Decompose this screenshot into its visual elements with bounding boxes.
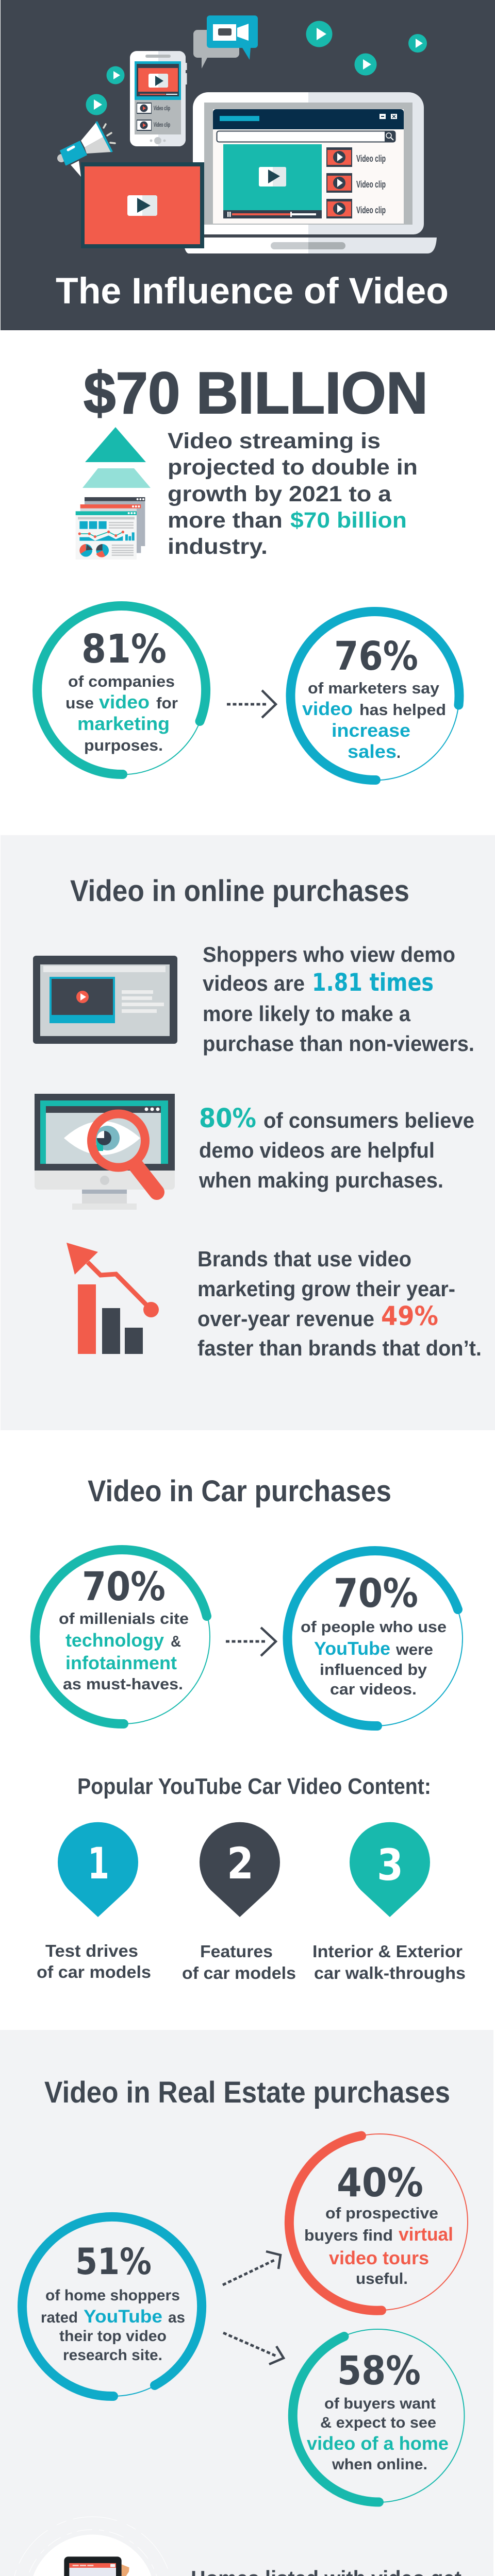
stat circle: 40%: video tours <box>329 2247 429 2268</box>
stat circle: 81% of companies: 81% <box>81 626 167 672</box>
stat circle: 58%: 58% <box>337 2348 421 2394</box>
panel: header <box>1 0 495 330</box>
text: 49%: faster than brands that don’t. <box>197 1336 482 1360</box>
pin 3: walk-throughs: Interior & Exterior <box>312 1942 463 1961</box>
text: streaming projection: projected to double in <box>168 455 418 480</box>
pin 3: walk-throughs: car walk-throughs <box>314 1963 466 1982</box>
stat circle: 70% of YouTube users <box>287 1551 463 1726</box>
text: 80%: when making purchases. <box>199 1168 443 1192</box>
stat circle: 70% of YouTube users: influenced by <box>320 1660 427 1679</box>
text: 49% <box>197 1247 482 1360</box>
icon: megaphone <box>57 122 115 177</box>
pin 3: walk-throughs <box>312 1822 466 1982</box>
stat circle: 76% of marketers: has helped <box>359 701 446 719</box>
stat circle: 51%: YouTube <box>84 2307 162 2327</box>
stat circle: 81% of companies: video <box>99 691 150 713</box>
stat circle: 70% of millenials: of millenials cite <box>59 1609 189 1628</box>
panel: streaming growth <box>37 361 459 780</box>
text: 80%: of consumers believe <box>263 1108 474 1132</box>
text: 1.81 times: more likely to make a <box>203 1002 411 1026</box>
arrow: 81 to 76 <box>227 690 276 718</box>
text: 80%: 80% <box>199 1104 256 1134</box>
stat circle: 81% of companies: purposes. <box>84 736 163 754</box>
stat circle: 76% of marketers: increase <box>332 720 410 741</box>
stat circle: 81% of companies: for <box>156 694 178 712</box>
stat circle: 70% of millenials: technology <box>65 1630 164 1651</box>
stat circle: 76% of marketers: . <box>397 743 401 761</box>
pin 1: test drives: Test drives <box>45 1941 138 1960</box>
stat circle: 51%: rated <box>41 2309 78 2326</box>
arrow: car stats <box>226 1628 276 1656</box>
panel: video in real estate purchases <box>0 2030 493 2576</box>
icon: smartphone <box>130 51 187 146</box>
stat circle: 58% <box>291 2329 464 2502</box>
stat circle: 70% of millenials: as must-haves. <box>63 1675 183 1693</box>
text: 80%: demo videos are helpful <box>199 1138 435 1162</box>
icon: laptop <box>183 92 437 253</box>
pin 2: features: 2 <box>227 1838 254 1889</box>
icon: monitor with magnifier and eye <box>35 1094 175 1210</box>
stat circle: 81% of companies <box>37 606 206 775</box>
heading: $70 billion: $70 BILLION <box>84 361 428 426</box>
heading: Video in online purchases <box>70 874 409 908</box>
text: 49%: 49% <box>381 1301 438 1332</box>
text: 49%: Brands that use video <box>197 1247 411 1271</box>
stat circle: 70% of millenials: infotainment <box>65 1652 177 1673</box>
pin 1: test drives <box>37 1822 151 1981</box>
stat circle: 76% of marketers <box>290 612 459 780</box>
browser window: Video clip <box>356 205 386 215</box>
icon: bar chart with arrow <box>67 1243 159 1354</box>
stat circle: 70% of millenials: 70% <box>82 1564 166 1610</box>
stat circle: 70% of YouTube users: 70% <box>334 1571 418 1617</box>
stat circle: 40%: buyers find <box>304 2226 393 2244</box>
text: streaming projection: $70 billion <box>290 508 407 533</box>
pin 2: features: Features <box>200 1942 273 1961</box>
stat circle: 70% of millenials: & <box>171 1632 181 1650</box>
text: 1.81 times <box>203 942 474 1056</box>
browser window <box>213 109 404 224</box>
icon: smartphone: Video clip <box>154 106 170 112</box>
stat circle: 70% of YouTube users: were <box>395 1640 433 1658</box>
stat circle: 76% of marketers: 76% <box>334 634 418 680</box>
stat circle: 81% of companies: marketing <box>77 713 170 734</box>
stat circle: 76% of marketers: of marketers say <box>308 679 440 697</box>
stat circle: 51%: as <box>168 2309 185 2326</box>
text: streaming projection: more than <box>168 508 283 533</box>
stat circle: 40%: virtual <box>399 2224 453 2245</box>
title: The Influence of Video <box>56 271 449 312</box>
text: streaming projection <box>168 429 418 559</box>
stat circle: 58%: when online. <box>332 2456 427 2473</box>
pin 2: features <box>182 1822 296 1982</box>
icon: red video player <box>81 162 204 248</box>
stat circle: 40%: useful. <box>356 2269 408 2287</box>
panel: video in car purchases <box>35 1475 466 1982</box>
stat circle: 40% <box>289 2134 468 2311</box>
stat circle: 76% of marketers: sales <box>348 741 397 762</box>
arrow: to 58% <box>223 2333 284 2364</box>
stat circle: 81% of companies: of companies <box>68 672 175 690</box>
text: 49%: over-year revenue <box>197 1307 374 1331</box>
browser window: Video clip <box>356 179 386 190</box>
subheading: Popular YouTube Car Video Content: <box>77 1774 431 1799</box>
pin 1: test drives: 1 <box>88 1838 109 1889</box>
arrow: to 40% <box>223 2251 280 2285</box>
icon: smartphone: Video clip <box>154 122 170 128</box>
stat circle: 70% of YouTube users: YouTube <box>314 1638 390 1659</box>
text: 49%: marketing grow their year- <box>197 1277 455 1301</box>
stat circle: 51%: of home shoppers <box>45 2287 180 2304</box>
text: 80% <box>199 1104 474 1192</box>
icon: growth arrow with reports <box>76 427 151 560</box>
stat circle: 58%: of buyers want <box>324 2395 436 2412</box>
stat circle: 51%: their top video <box>59 2328 167 2345</box>
text: 1.81 times: purchase than non-viewers. <box>203 1031 474 1056</box>
stat circle: 40%: 40% <box>337 2160 423 2206</box>
heading: Video in Real Estate purchases <box>44 2076 450 2109</box>
text: 1.81 times: 1.81 times <box>312 969 434 997</box>
pin 3: walk-throughs: 3 <box>377 1840 403 1890</box>
stat circle: 51%: 51% <box>75 2241 152 2283</box>
pin 2: features: of car models <box>182 1963 296 1982</box>
icon: chat bubbles with camera <box>193 15 258 69</box>
text: streaming projection: industry. <box>168 534 268 559</box>
stat circle: 51%: research site. <box>63 2347 162 2364</box>
stat circle: 81% of companies: use <box>65 694 94 712</box>
browser window: Video clip <box>356 154 386 164</box>
panel: video in online purchases <box>1 835 495 1430</box>
stat circle: 40%: of prospective <box>325 2204 438 2222</box>
heading: Video in Car purchases <box>88 1475 391 1508</box>
icon: hands holding phone <box>11 2517 210 2576</box>
stat circle: 70% of millenials <box>35 1550 210 1724</box>
stat circle: 76% of marketers: video <box>302 698 353 719</box>
icon: floating play buttons <box>86 21 427 115</box>
icon: monitor with video <box>33 956 177 1044</box>
stat circle: 58%: & expect to see <box>320 2414 436 2431</box>
stat circle: 70% of YouTube users: car videos. <box>330 1680 417 1698</box>
text: 1.81 times: Shoppers who view demo <box>203 942 455 967</box>
stat circle: 58%: video of a home <box>307 2433 449 2454</box>
text: streaming projection: Video streaming is <box>168 429 381 453</box>
pin 1: test drives: of car models <box>37 1962 151 1981</box>
text: streaming projection: growth by 2021 to a <box>168 482 392 506</box>
text: 1.81 times: videos are <box>203 971 305 995</box>
stat circle: 70% of YouTube users: of people who use <box>301 1618 447 1636</box>
stat circle: 51% <box>22 2217 203 2396</box>
